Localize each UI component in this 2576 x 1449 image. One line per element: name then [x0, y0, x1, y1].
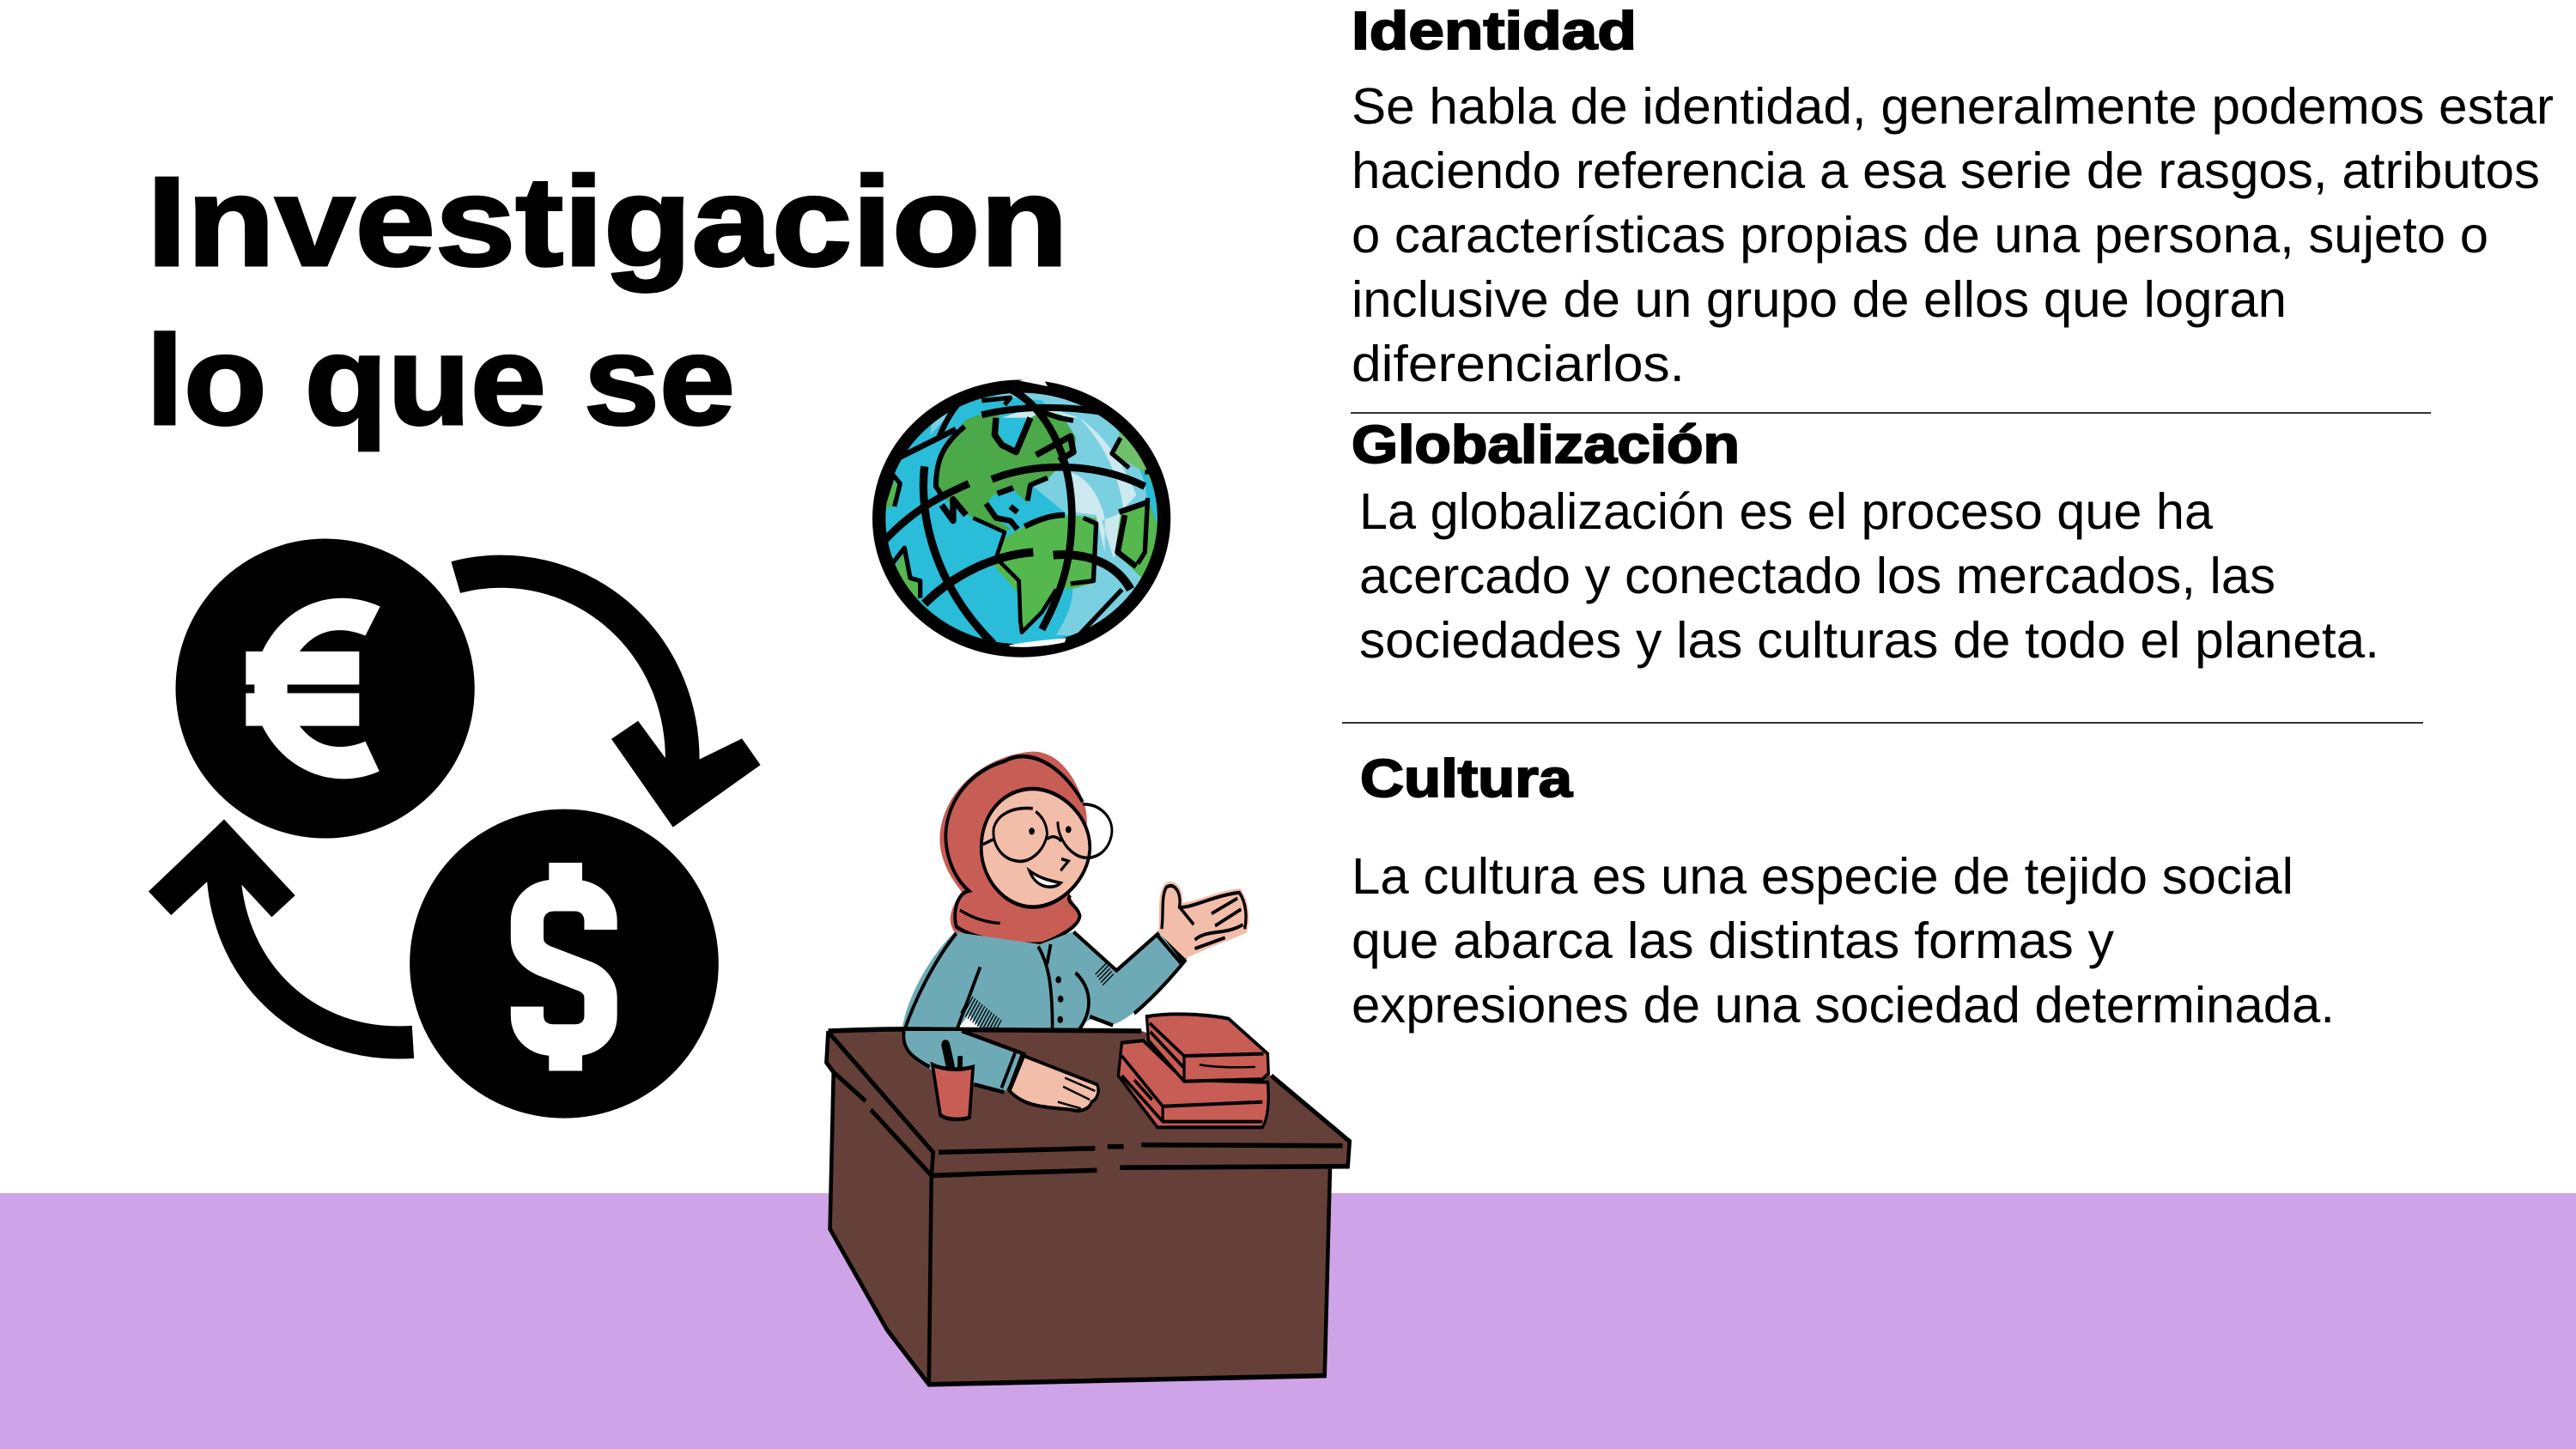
torso and raised arm — [901, 931, 1186, 1036]
title — [146, 151, 1068, 452]
text block: Cultura: que abarca las distintas formas y — [1352, 912, 2115, 969]
raised hand — [1161, 884, 1247, 955]
title: lo que se — [146, 310, 735, 452]
text block: Globalización — [1352, 415, 2379, 669]
purple floor band — [0, 1193, 2576, 1449]
hijab — [939, 752, 1087, 945]
stack of books — [1118, 1014, 1268, 1127]
icon: globe — [877, 376, 1166, 653]
resting hand — [1010, 1056, 1098, 1111]
text block: Identidad: Identidad — [1352, 2, 1637, 61]
text block: Cultura: La cultura es una especie de tejido social — [1352, 848, 2293, 905]
text block: Cultura: expresiones de una sociedad determinada. — [1352, 977, 2335, 1034]
text block: Identidad: Se habla de identidad, generalmente podemos estar — [1352, 78, 2554, 135]
text block: Globalización: Globalización — [1352, 415, 1740, 475]
text block: Globalización: acercado y conectado los mercados, las — [1359, 548, 2275, 604]
desk — [826, 1029, 1350, 1385]
pencil cup — [933, 1045, 973, 1119]
text block: Globalización: sociedades y las culturas de todo el planeta. — [1359, 612, 2379, 669]
lower arm — [903, 1031, 1026, 1093]
text block: Globalización: La globalización es el proceso que ha — [1359, 483, 2213, 540]
text block: Identidad — [1352, 2, 2554, 392]
text block: Identidad: o características propias de una persona, sujeto o — [1352, 207, 2488, 264]
icon: currency exchange — [149, 539, 761, 1119]
text block: Cultura — [1352, 749, 2335, 1034]
text block: Identidad: diferenciarlos. — [1352, 336, 1685, 392]
face and glasses — [981, 789, 1090, 907]
text block: Identidad: haciendo referencia a esa serie de rasgos, atributos — [1352, 142, 2540, 199]
text block: Identidad: inclusive de un grupo de ellos que logran — [1352, 271, 2287, 328]
title: Investigacion — [147, 151, 1068, 293]
text block: Cultura: Cultura — [1360, 749, 1573, 809]
illustration: woman at desk — [826, 752, 1350, 1385]
